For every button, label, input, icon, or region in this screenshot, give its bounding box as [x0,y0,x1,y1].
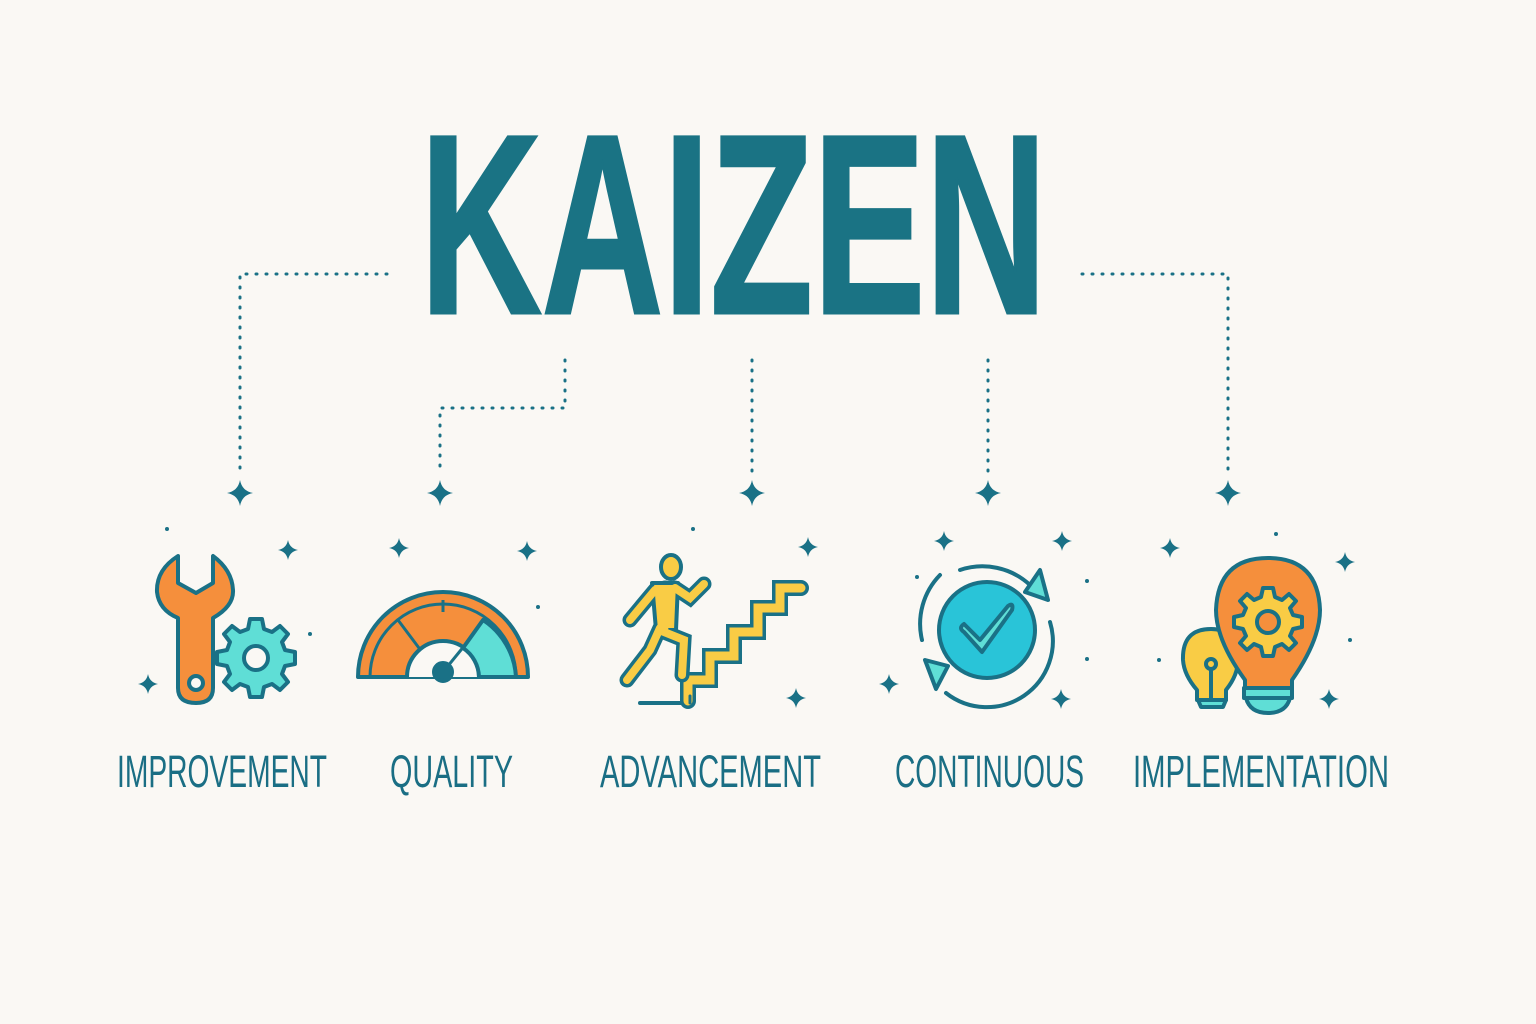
icon: person climbing stairs [627,555,801,703]
icon: continuous check cycle [920,566,1053,707]
connector: continuous [986,360,990,472]
title: KAIZEN [420,82,1047,368]
decorative sparkles [138,527,1355,709]
icon: wrench and gear [157,556,295,703]
label: quality: QUALITY [390,746,513,797]
connector: advancement [750,360,754,472]
connector stars [227,480,1241,506]
label: advancement: ADVANCEMENT [600,746,821,797]
label: improvement: IMPROVEMENT [117,746,327,797]
icon: light bulbs with gear [1183,558,1320,713]
connector: implementation [1082,274,1228,472]
connector: improvement [240,274,387,472]
icon: gauge [358,592,528,681]
connector: quality [440,360,565,472]
label: continuous: CONTINUOUS [895,746,1084,797]
label: implementation: IMPLEMENTATION [1133,746,1389,797]
